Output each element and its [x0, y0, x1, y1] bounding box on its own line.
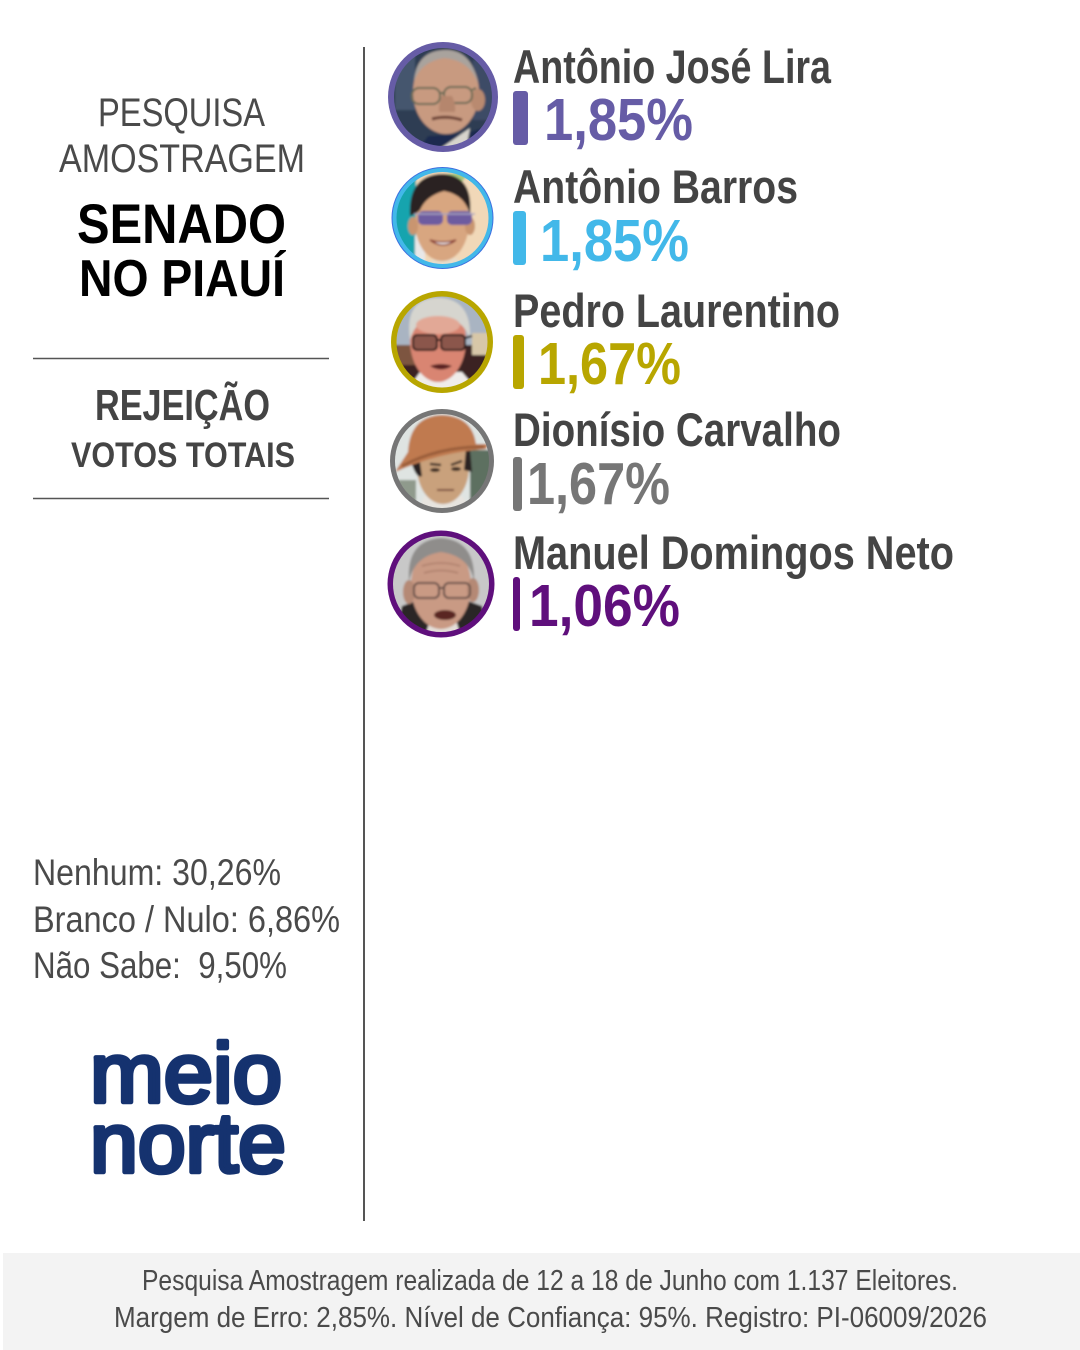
- heading: pesquisa amostragem: [59, 91, 305, 181]
- name: Manuel Domingos Neto: [513, 526, 954, 579]
- name: Antônio Barros: [513, 160, 798, 213]
- text block: other responses: Não Sabe: 9,50%: [33, 945, 287, 986]
- heading: senado no piauí: [77, 192, 286, 308]
- logo: meio norte: meio: [90, 1026, 282, 1120]
- name: Antônio José Lira: [513, 40, 832, 93]
- heading: senado no piauí: NO PIAUÍ: [79, 250, 286, 308]
- value: 1,06%: [529, 573, 680, 639]
- value: 1,67%: [527, 451, 670, 517]
- name: Dionísio Carvalho: [513, 403, 841, 456]
- portrait: Antônio José Lira: [388, 42, 498, 152]
- heading: senado no piauí: SENADO: [77, 192, 286, 255]
- portrait: Pedro Laurentino: [391, 291, 493, 393]
- heading: rejeição votos totais: REJEIÇÃO: [95, 380, 270, 430]
- heading: rejeição votos totais: VOTOS TOTAIS: [71, 436, 295, 475]
- text block: other responses: [33, 852, 340, 986]
- value: 1,85%: [540, 208, 689, 274]
- heading: pesquisa amostragem: PESQUISA: [98, 91, 265, 135]
- value: 1,67%: [538, 331, 681, 397]
- heading: pesquisa amostragem: AMOSTRAGEM: [59, 137, 305, 181]
- logo: meio norte: [90, 1026, 286, 1190]
- portrait: Dionísio Carvalho: [390, 409, 500, 513]
- candidate: Manuel Domingos Neto: [388, 526, 954, 640]
- candidate: Antônio Barros: [392, 160, 798, 274]
- candidate: Pedro Laurentino: [391, 284, 840, 397]
- candidate: Dionísio Carvalho: [390, 403, 841, 517]
- bar: [513, 577, 520, 631]
- candidate: Antônio José Lira: [388, 40, 832, 153]
- footer: methodology: Pesquisa Amostragem realizada de 12 a 18 de Junho com 1.137 Eleitores.: [142, 1265, 958, 1297]
- bar: [513, 91, 528, 145]
- bar: [513, 335, 524, 389]
- portrait: Antônio Barros: [392, 167, 494, 270]
- footer: methodology: [3, 1253, 1080, 1350]
- heading: rejeição votos totais: [71, 380, 295, 475]
- value: 1,85%: [544, 87, 693, 153]
- bar: [513, 457, 522, 511]
- title block: [59, 91, 305, 308]
- name: Pedro Laurentino: [513, 284, 840, 337]
- footer: methodology: Margem de Erro: 2,85%. Nível de Confiança: 95%. Registro: PI-06009/2026: [114, 1302, 987, 1334]
- logo: meio norte: norte: [90, 1096, 286, 1190]
- text block: other responses: Nenhum: 30,26%: [33, 852, 281, 893]
- portrait: Manuel Domingos Neto: [388, 530, 494, 640]
- bar: [513, 211, 526, 265]
- text block: other responses: Branco / Nulo: 6,86%: [33, 899, 340, 940]
